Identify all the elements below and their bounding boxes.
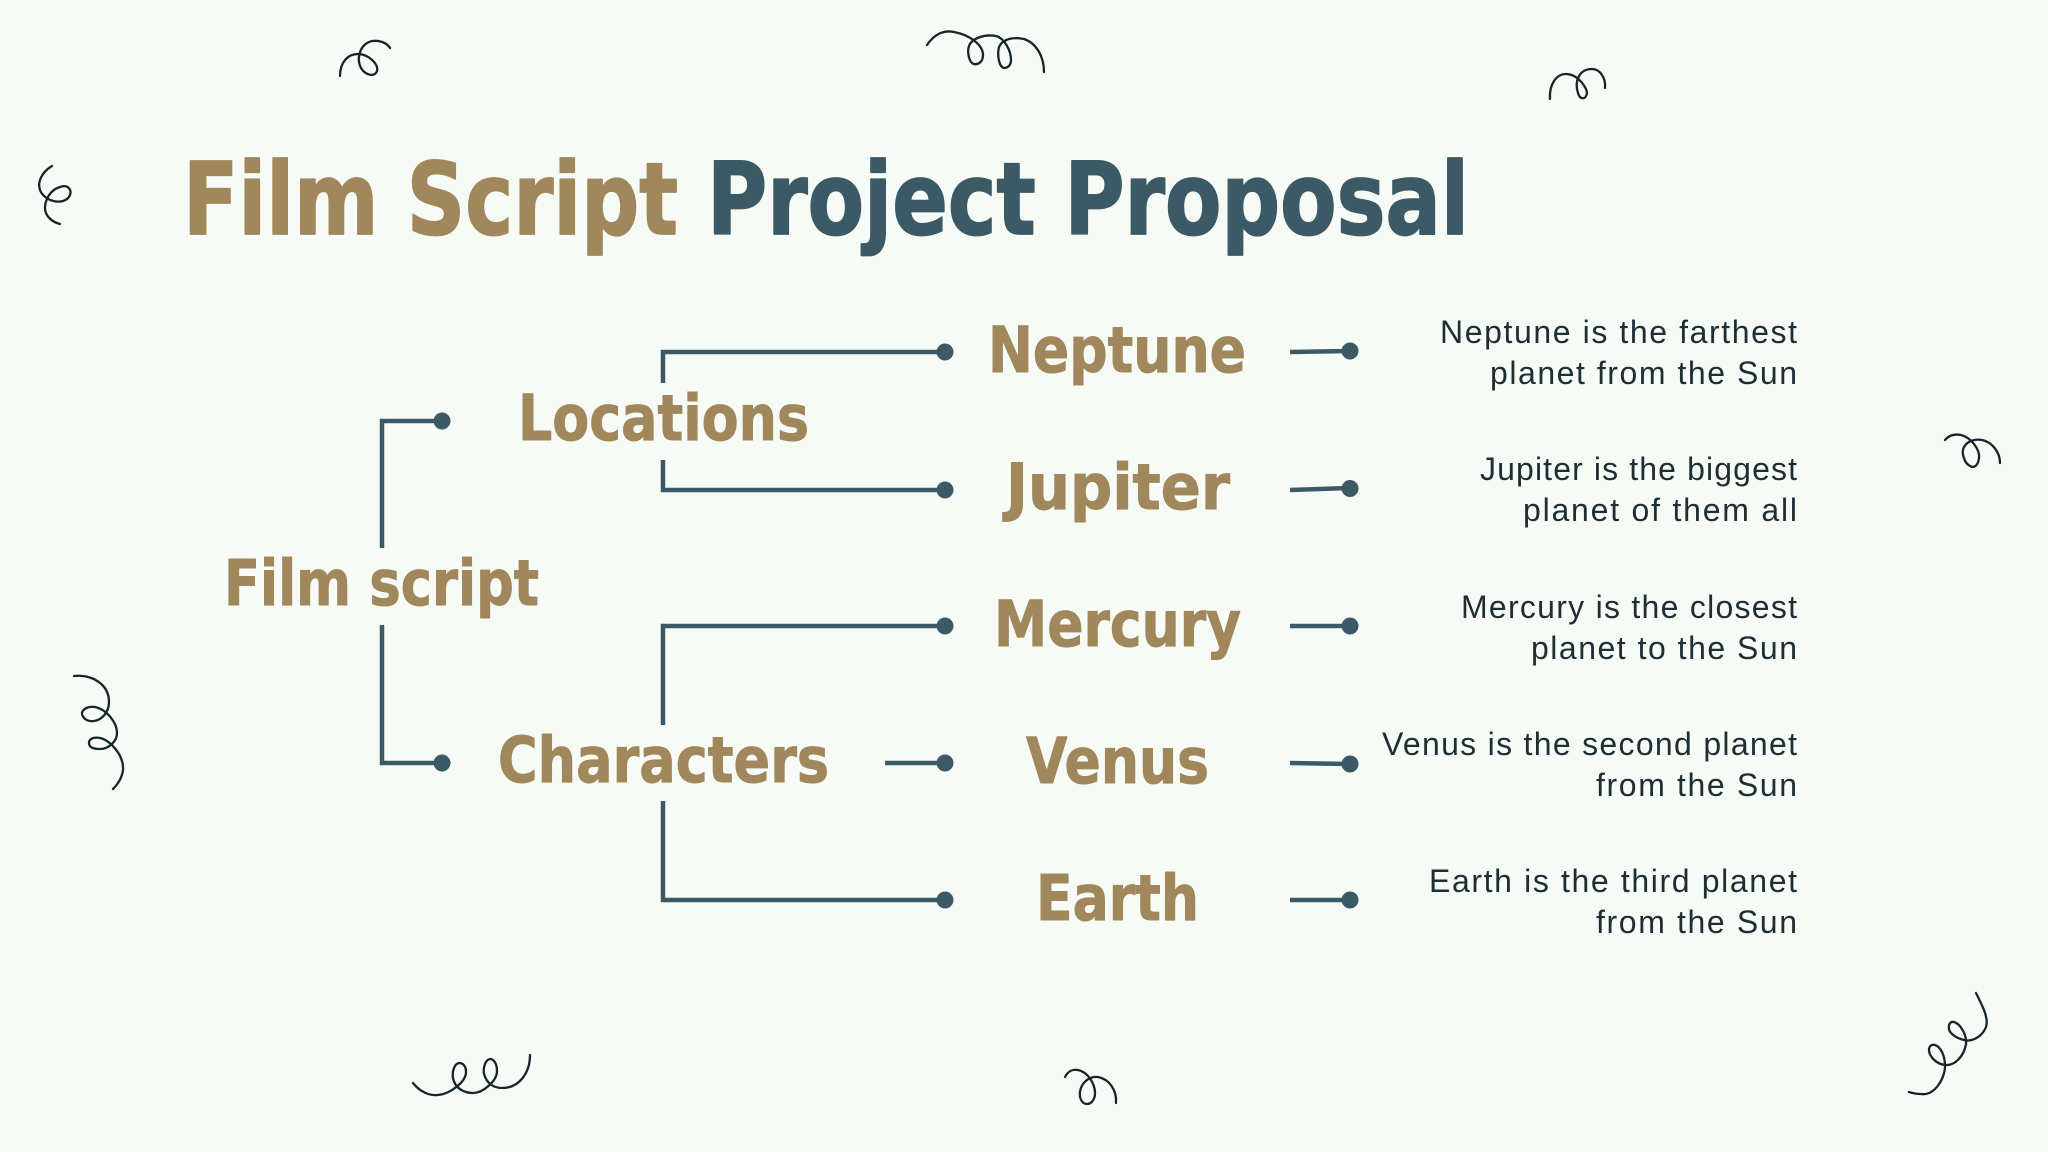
squiggle: bottom left — [413, 1055, 530, 1095]
description: Neptune: Neptune is the farthest — [1440, 314, 1797, 350]
description: Mercury — [1461, 589, 1797, 666]
description: Mercury: planet to the Sun — [1531, 630, 1797, 666]
connector: Neptune to description — [1290, 342, 1358, 360]
connector: Mercury to description — [1290, 618, 1358, 634]
squiggle: bottom center — [1065, 1070, 1116, 1104]
squiggle: left upper — [39, 166, 70, 224]
squiggle: bottom right — [1909, 993, 1987, 1094]
connector: Locations to Neptune — [663, 344, 954, 383]
connector: Characters to Venus — [885, 754, 954, 772]
connector: Characters to Mercury — [663, 618, 954, 725]
squiggle: top right — [1550, 69, 1605, 99]
label: Locations: Locations — [518, 382, 809, 455]
squiggle: top center — [927, 31, 1044, 72]
connector: Characters to Earth — [663, 801, 954, 908]
title: Project Proposal — [707, 141, 1469, 258]
description: Earth: Earth is the third planet — [1429, 863, 1797, 899]
label: Venus: Venus — [1026, 725, 1209, 798]
label: Neptune: Neptune — [988, 314, 1246, 387]
description: Jupiter: Jupiter is the biggest — [1480, 451, 1797, 487]
description: Mercury: Mercury is the closest — [1461, 589, 1797, 625]
description: Neptune — [1440, 314, 1797, 391]
squiggle: left lower — [74, 676, 123, 789]
connector: Earth to description — [1290, 892, 1358, 908]
description: Earth: from the Sun — [1596, 904, 1797, 940]
description: Earth — [1429, 863, 1797, 940]
title — [183, 141, 1469, 258]
title: Film Script — [183, 141, 678, 258]
description: Neptune: planet from the Sun — [1490, 355, 1797, 391]
connector: Locations to Jupiter — [663, 460, 954, 498]
squiggle: right — [1945, 435, 2000, 467]
label: Film script root: Film script — [224, 547, 539, 620]
description: Jupiter: planet of them all — [1523, 492, 1797, 528]
description: Venus — [1382, 726, 1797, 803]
description: Jupiter — [1480, 451, 1797, 528]
label: Mercury: Mercury — [994, 588, 1241, 661]
squiggle: top left — [340, 41, 390, 76]
label: Characters: Characters — [498, 724, 829, 797]
connector: Film script to Locations — [382, 412, 450, 548]
label: Jupiter: Jupiter — [1002, 451, 1230, 524]
connector: Jupiter to description — [1290, 480, 1358, 497]
description: Venus: from the Sun — [1596, 767, 1797, 803]
description: Venus: Venus is the second planet — [1382, 726, 1797, 762]
label: Earth: Earth — [1036, 862, 1199, 935]
connector: Venus to description — [1290, 756, 1358, 772]
connector: Film script to Characters — [382, 625, 450, 772]
